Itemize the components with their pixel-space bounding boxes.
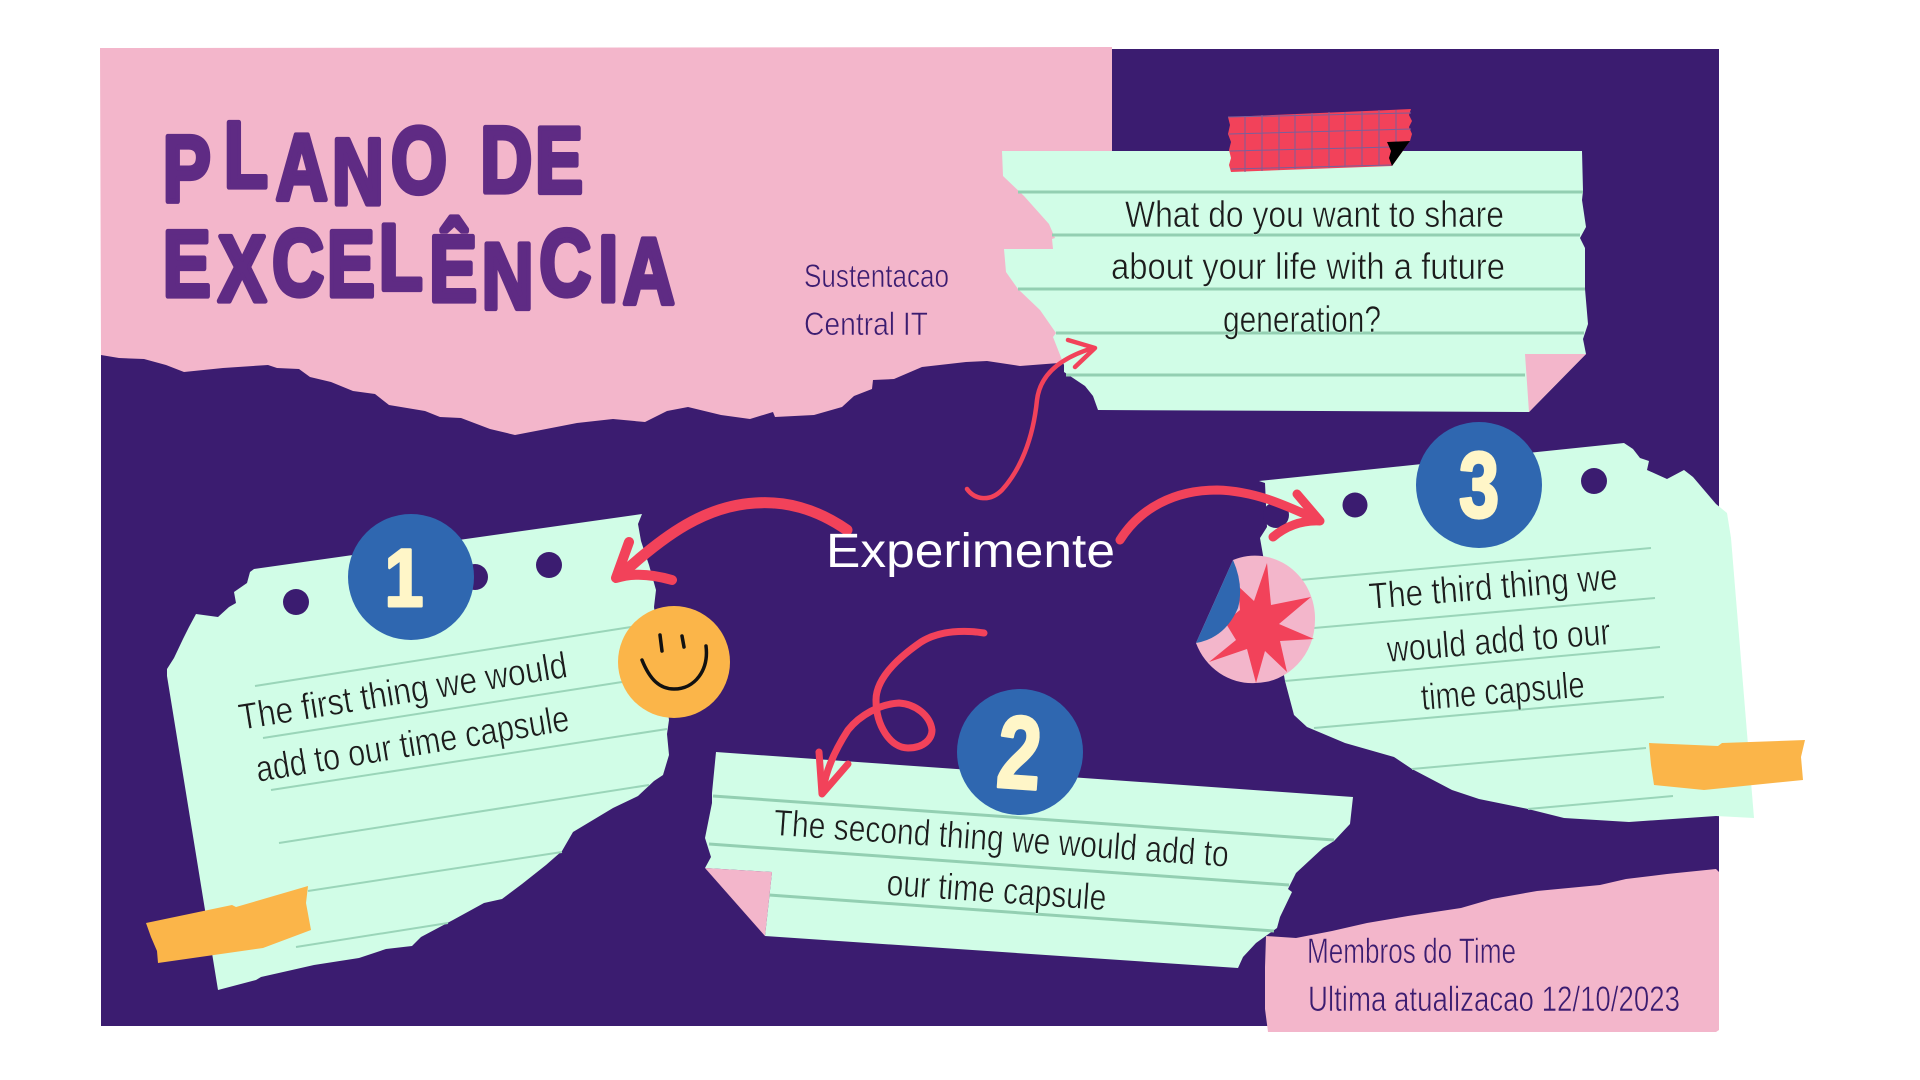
arrow: to note 3 — [1120, 490, 1320, 540]
number badge 1 — [348, 514, 474, 640]
ruled lines — [1018, 192, 1585, 375]
punched holes — [283, 552, 562, 615]
panel: note 1 — [146, 514, 730, 990]
panel: torn pink header — [100, 47, 1112, 435]
central label: Experimente — [826, 525, 1115, 578]
question text: What do you want to share — [1125, 194, 1504, 235]
question text: generation? — [1223, 299, 1381, 340]
note 3 text: time capsule — [1419, 664, 1586, 718]
panel: note 2 — [705, 689, 1353, 968]
note 3 text: would add to our — [1385, 611, 1612, 670]
number badge 3 — [1416, 422, 1542, 548]
arrow: loop to note 2 — [819, 631, 984, 794]
torn pink paper — [1265, 869, 1719, 1032]
footer text — [1307, 932, 1680, 1019]
number badge 1: 1 — [385, 533, 423, 624]
subtitle: Central IT — [804, 306, 928, 342]
footer text: Membros do Time — [1307, 932, 1516, 971]
note 1 text — [236, 644, 572, 790]
footer text: Ultima atualizacao 12/10/2023 — [1308, 980, 1680, 1019]
orange tape — [146, 886, 311, 963]
title — [163, 102, 675, 329]
number badge 2: 2 — [994, 694, 1045, 812]
ruled lines — [1285, 548, 1673, 809]
title: PLANO DE — [163, 102, 583, 224]
note 3 text: The third thing we — [1367, 556, 1619, 617]
panel: bottom-right footer — [1265, 869, 1719, 1032]
note 3 text — [1367, 556, 1619, 718]
note paper — [1002, 151, 1588, 412]
ruled lines — [255, 627, 667, 947]
background panel — [101, 49, 1719, 1026]
title: EXCELÊNCIA — [163, 204, 675, 329]
panel: note 3 — [1196, 422, 1805, 822]
note 2 text: our time capsule — [885, 862, 1108, 918]
arrow: to top note — [967, 340, 1095, 498]
question text: about your life with a future — [1111, 246, 1505, 287]
note 2 text: The second thing we would add to — [772, 802, 1230, 875]
note 1 text: add to our time capsule — [253, 698, 572, 790]
icon: smiley — [618, 606, 730, 718]
punched holes — [1263, 468, 1607, 528]
orange tape — [1649, 740, 1805, 790]
red grid tape — [1228, 109, 1412, 172]
arrow: to note 1 — [616, 503, 847, 580]
icon: star sticker — [1196, 556, 1315, 683]
folded corner — [705, 868, 772, 936]
ruled lines — [709, 796, 1334, 931]
folded corner — [1525, 354, 1586, 412]
note 2 text — [772, 802, 1230, 918]
number badge 2 — [957, 689, 1083, 815]
subtitle — [804, 258, 949, 342]
subtitle: Sustentacao — [804, 258, 949, 294]
note paper — [705, 752, 1353, 968]
question text — [1111, 194, 1505, 340]
panel: top question note — [1002, 151, 1588, 412]
number badge 3: 3 — [1459, 433, 1499, 537]
note paper — [1259, 443, 1754, 822]
note 1 text: The first thing we would — [236, 644, 570, 738]
note paper — [167, 514, 669, 990]
